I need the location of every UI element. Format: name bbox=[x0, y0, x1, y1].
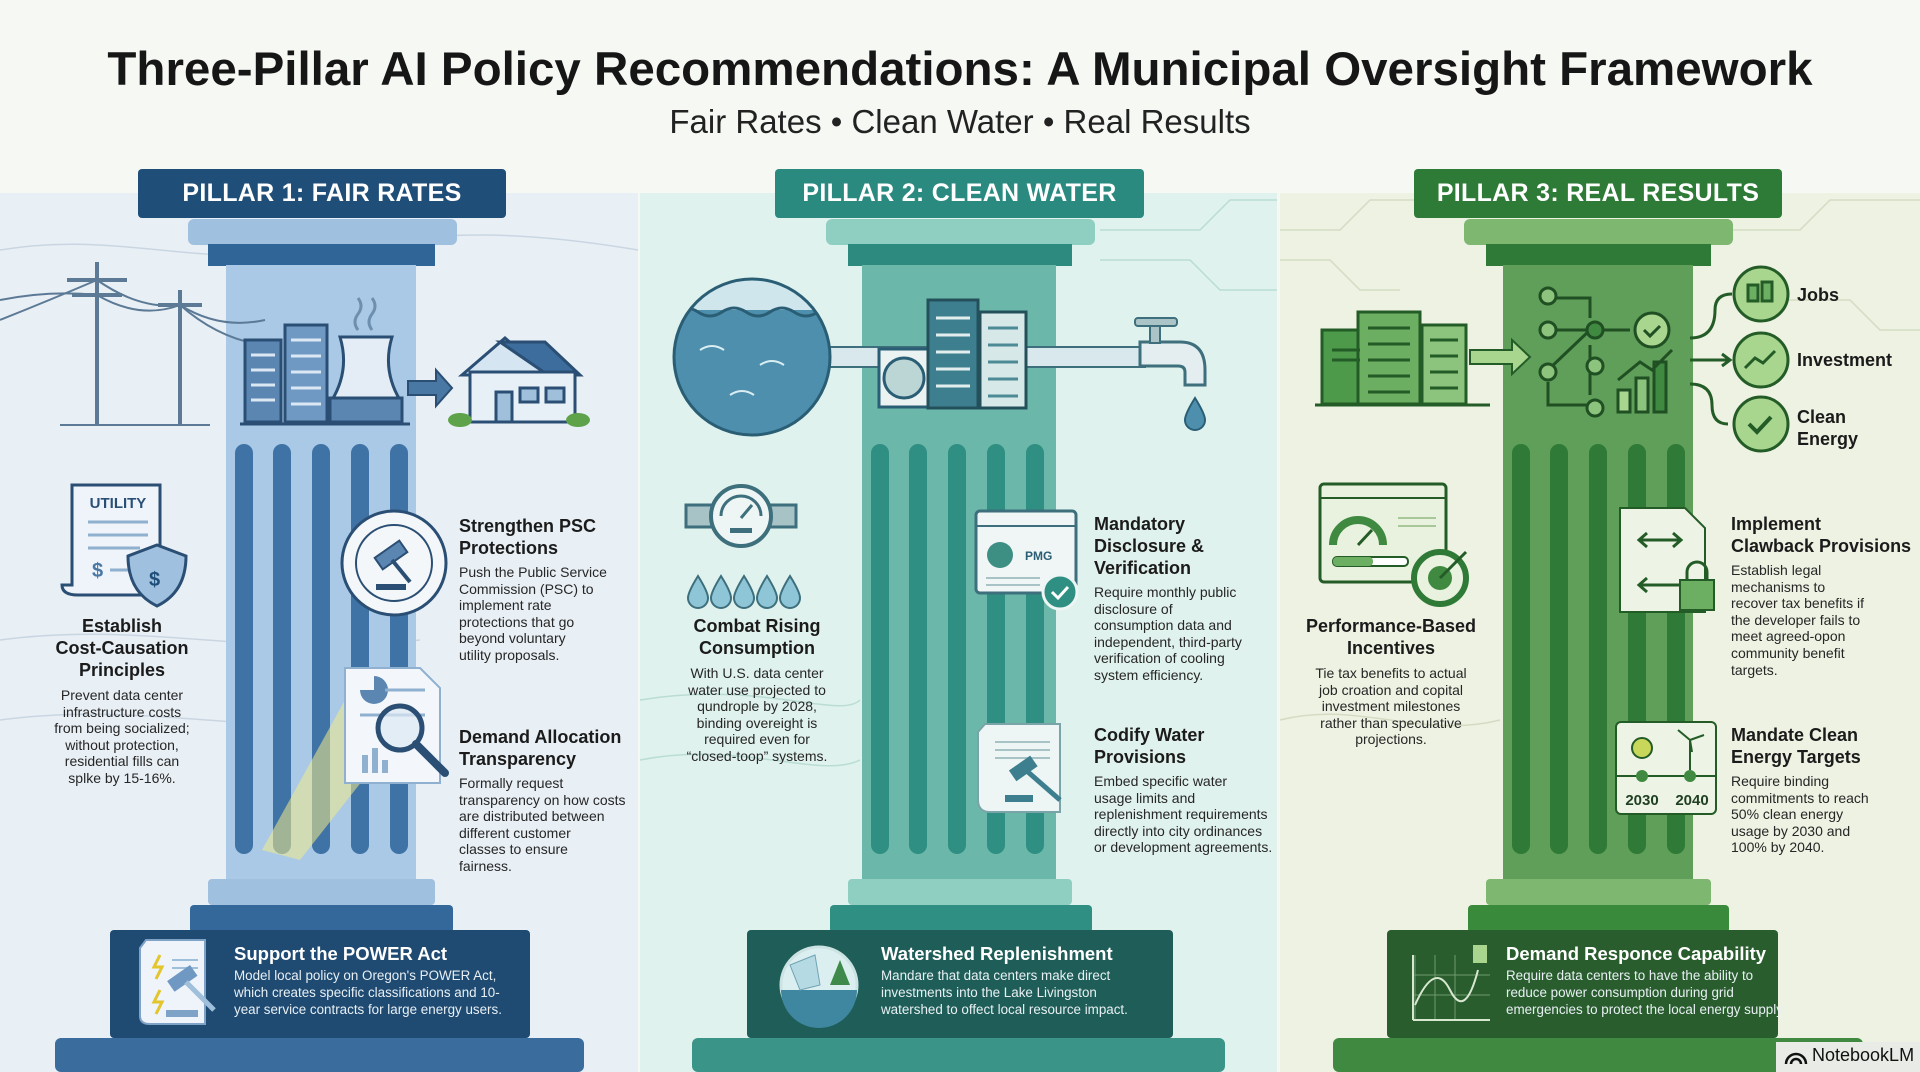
text block: rising consumption: required even for bbox=[704, 731, 810, 747]
text block: rising consumption: Combat Rising bbox=[693, 616, 820, 636]
text block: cost-causation: Establish bbox=[82, 616, 162, 636]
icon: power poles bbox=[0, 262, 265, 425]
text block: codify water bbox=[1094, 725, 1272, 855]
text block: performance incentives: job croation and copital bbox=[1319, 682, 1463, 698]
text block: PSC protections: Protections bbox=[459, 538, 558, 558]
icon: outcome circles jobs investment clean energy bbox=[1690, 267, 1788, 451]
text block: rising consumption bbox=[687, 616, 827, 764]
logo: NotebookLM badge bbox=[1776, 1042, 1920, 1072]
panel: clean water background bbox=[640, 193, 1277, 1072]
text block: performance incentives: Incentives bbox=[1347, 638, 1435, 658]
text block: watershed bbox=[881, 943, 1128, 1017]
text block: demand response: Require data centers to have the ability to bbox=[1506, 968, 1753, 983]
icon: cooling fan and servers bbox=[879, 300, 1026, 408]
text block: POWER Act: year service contracts for large energy users. bbox=[234, 1002, 502, 1017]
icon: clean energy targets 2030 2040: 2040 bbox=[1675, 792, 1709, 809]
text block: watershed: watershed to offect local resource impact. bbox=[881, 1002, 1128, 1017]
text block: rising consumption: qundrople by 2028, bbox=[697, 698, 817, 714]
text block: clawback bbox=[1731, 514, 1911, 678]
text block: watershed: Watershed Replenishment bbox=[881, 943, 1113, 964]
text block: POWER Act: which creates specific classifications and 10- bbox=[234, 985, 500, 1000]
text block: cost-causation: Prevent data center bbox=[61, 687, 183, 703]
text block: POWER Act: Support the POWER Act bbox=[234, 943, 447, 964]
text block: clawback: Implement bbox=[1731, 514, 1821, 534]
heading: pillar 1 bbox=[138, 169, 506, 218]
text block: demand allocation: Formally request bbox=[459, 775, 563, 791]
icon: PSC seal bbox=[342, 511, 446, 615]
text block: demand allocation: Demand Allocation bbox=[459, 727, 621, 747]
icon: disclosure report bbox=[976, 511, 1077, 609]
text block: PSC protections: Push the Public Service bbox=[459, 564, 607, 580]
icon: utility bill with shield: $ bbox=[92, 560, 103, 582]
icon: water meter and drops bbox=[686, 486, 800, 608]
text block: PSC protections: Commission (PSC) to bbox=[459, 581, 594, 597]
text block: clean energy targets: Require binding bbox=[1731, 773, 1829, 789]
pillar 3 column bbox=[1333, 219, 1863, 1072]
text block: clawback: mechanisms to bbox=[1731, 579, 1825, 595]
text block: POWER Act: Model local policy on Oregon's POWER Act, bbox=[234, 968, 496, 983]
text block: disclosure: independent, third-party bbox=[1094, 634, 1242, 650]
text block: clean energy targets: 50% clean energy bbox=[1731, 806, 1843, 822]
text block: clawback: meet agreed-opon bbox=[1731, 628, 1845, 644]
icon: clean energy targets 2030 2040 bbox=[1616, 722, 1716, 814]
text block: PSC protections: protections that go bbox=[459, 614, 574, 630]
heading: pillar 2 bbox=[775, 169, 1144, 218]
text block: disclosure: Disclosure & bbox=[1094, 536, 1204, 556]
pillar 1 column bbox=[55, 219, 584, 1072]
text block: clean energy targets: 100% by 2040. bbox=[1731, 839, 1824, 855]
text block: disclosure: verification of cooling bbox=[1094, 650, 1225, 666]
callout: demand response box bbox=[1387, 930, 1778, 1038]
text block: disclosure: consumption data and bbox=[1094, 617, 1232, 633]
text block: demand response: reduce power consumption during grid bbox=[1506, 985, 1734, 1000]
text block: cost-causation: infrastructure costs bbox=[63, 704, 181, 720]
text block: codify water: replenishment requirements bbox=[1094, 806, 1268, 822]
text block: demand allocation: are distributed between bbox=[459, 808, 605, 824]
text block: cost-causation: splke by 15-16%. bbox=[68, 770, 176, 786]
icon: disclosure report: PMG bbox=[1025, 549, 1052, 563]
text block: cost-causation: Principles bbox=[79, 660, 165, 680]
text block: clean energy targets bbox=[1731, 725, 1869, 855]
logo text: NotebookLM: NotebookLM bbox=[1812, 1045, 1914, 1065]
text block: disclosure: system efficiency. bbox=[1094, 667, 1203, 683]
text block: demand response: Demand Responce Capability bbox=[1506, 943, 1766, 964]
callout: POWER Act box bbox=[110, 930, 530, 1038]
text block: codify water: Codify Water bbox=[1094, 725, 1204, 745]
heading: pillar 1: PILLAR 1: FAIR RATES bbox=[182, 179, 462, 207]
text block: rising consumption: binding overeight is bbox=[697, 715, 817, 731]
text block: clawback: Clawback Provisions bbox=[1731, 536, 1911, 556]
text block: performance incentives bbox=[1306, 616, 1476, 747]
text block: codify water: usage limits and bbox=[1094, 790, 1195, 806]
text block: watershed: Mandare that data centers make direct bbox=[881, 968, 1110, 983]
text block: disclosure: disclosure of bbox=[1094, 601, 1173, 617]
text block: demand response bbox=[1506, 943, 1786, 1017]
heading: pillar 2: PILLAR 2: CLEAN WATER bbox=[802, 179, 1117, 207]
text block: clean energy targets: Energy Targets bbox=[1731, 747, 1861, 767]
arrow: to house bbox=[408, 370, 452, 406]
text block: cost-causation: residential fills can bbox=[65, 753, 179, 769]
title: Three-Pillar AI Policy Recommendations: A Municipal Oversight Framework bbox=[107, 43, 1813, 96]
text block: demand response: emergencies to protect the local energy supply. bbox=[1506, 1002, 1786, 1017]
text block: codify water: directly into city ordinances bbox=[1094, 823, 1262, 839]
labels: outcome circles: Energy bbox=[1797, 429, 1858, 449]
icon: utility bill with shield: $ bbox=[149, 569, 160, 591]
text block: clawback: targets. bbox=[1731, 662, 1778, 678]
icon: house bbox=[448, 338, 590, 427]
text block: clean energy targets: Mandate Clean bbox=[1731, 725, 1858, 745]
text block: performance incentives: Tie tax benefits to actual bbox=[1315, 665, 1467, 681]
text block: performance incentives: investment milestones bbox=[1322, 698, 1460, 714]
icon: servers and cooling tower bbox=[240, 298, 410, 424]
text block: performance incentives: Performance-Based bbox=[1306, 616, 1476, 636]
icon: flow network and growth chart bbox=[1540, 288, 1672, 416]
icon: performance dashboard with target bbox=[1320, 484, 1466, 604]
icon: water reservoir with pipe and faucet bbox=[670, 270, 1205, 435]
text block: demand allocation: different customer bbox=[459, 825, 571, 841]
text block: clean energy targets: usage by 2030 and bbox=[1731, 823, 1850, 839]
text block: demand allocation bbox=[459, 727, 626, 874]
text block: disclosure: Require monthly public bbox=[1094, 584, 1236, 600]
pillar 2 column bbox=[692, 219, 1225, 1072]
panel: real results background bbox=[1280, 193, 1920, 1072]
text block: PSC protections bbox=[459, 516, 607, 663]
text block: PSC protections: implement rate bbox=[459, 597, 552, 613]
text block: POWER Act bbox=[234, 943, 502, 1017]
text block: cost-causation: Cost-Causation bbox=[55, 638, 188, 658]
text block: PSC protections: utility proposals. bbox=[459, 647, 559, 663]
text block: demand allocation: classes to ensure bbox=[459, 841, 568, 857]
text block: clawback: Establish legal bbox=[1731, 562, 1821, 578]
text block: cost-causation bbox=[54, 616, 190, 786]
text block: clawback: the developer fails to bbox=[1731, 612, 1860, 628]
text block: demand allocation: Transparency bbox=[459, 749, 576, 769]
icon: clawback document with lock bbox=[1620, 508, 1714, 612]
icon: document with magnifier bbox=[262, 668, 445, 860]
text block: cost-causation: from being socialized; bbox=[54, 720, 190, 736]
text block: codify water: Provisions bbox=[1094, 747, 1186, 767]
text block: disclosure: Mandatory bbox=[1094, 514, 1185, 534]
text block: demand allocation: transparency on how costs bbox=[459, 792, 626, 808]
text block: disclosure bbox=[1094, 514, 1242, 683]
labels: outcome circles: Jobs bbox=[1797, 285, 1839, 305]
labels: outcome circles bbox=[1797, 285, 1892, 449]
text block: clawback: recover tax benefits if bbox=[1731, 595, 1864, 611]
icon: utility bill with shield bbox=[62, 485, 186, 606]
callout: watershed box bbox=[747, 930, 1173, 1038]
text block: disclosure: Verification bbox=[1094, 558, 1191, 578]
text block: watershed: investments into the Lake Livingston bbox=[881, 985, 1097, 1000]
text block: cost-causation: without protection, bbox=[65, 737, 179, 753]
icon: clean energy targets 2030 2040: 2030 bbox=[1625, 792, 1659, 809]
text block: rising consumption: water use projected to bbox=[688, 682, 826, 698]
text block: codify water: or development agreements. bbox=[1094, 839, 1272, 855]
text block: rising consumption: With U.S. data center bbox=[690, 665, 824, 681]
icon: green data center with arrow bbox=[1315, 312, 1530, 405]
text block: performance incentives: projections. bbox=[1355, 731, 1427, 747]
panel: fair rates background bbox=[0, 193, 638, 1072]
heading: pillar 3: PILLAR 3: REAL RESULTS bbox=[1437, 179, 1759, 207]
text block: codify water: Embed specific water bbox=[1094, 773, 1227, 789]
icon: ordinance scroll with gavel bbox=[978, 724, 1060, 812]
text block: clawback: community benefit bbox=[1731, 645, 1845, 661]
labels: outcome circles: Investment bbox=[1797, 350, 1892, 370]
text block: performance incentives: rather than speculative bbox=[1320, 715, 1462, 731]
text block: PSC protections: beyond voluntary bbox=[459, 630, 566, 646]
icon: utility bill with shield: UTILITY bbox=[90, 495, 146, 512]
labels: outcome circles: Clean bbox=[1797, 407, 1846, 427]
text block: demand allocation: fairness. bbox=[459, 858, 512, 874]
text block: rising consumption: “closed-toop” systems. bbox=[687, 748, 827, 764]
subtitle: Fair Rates • Clean Water • Real Results bbox=[669, 103, 1251, 140]
text block: clean energy targets: commitments to reach bbox=[1731, 790, 1869, 806]
text block: rising consumption: Consumption bbox=[699, 638, 815, 658]
text block: PSC protections: Strengthen PSC bbox=[459, 516, 596, 536]
heading: pillar 3 bbox=[1414, 169, 1782, 218]
